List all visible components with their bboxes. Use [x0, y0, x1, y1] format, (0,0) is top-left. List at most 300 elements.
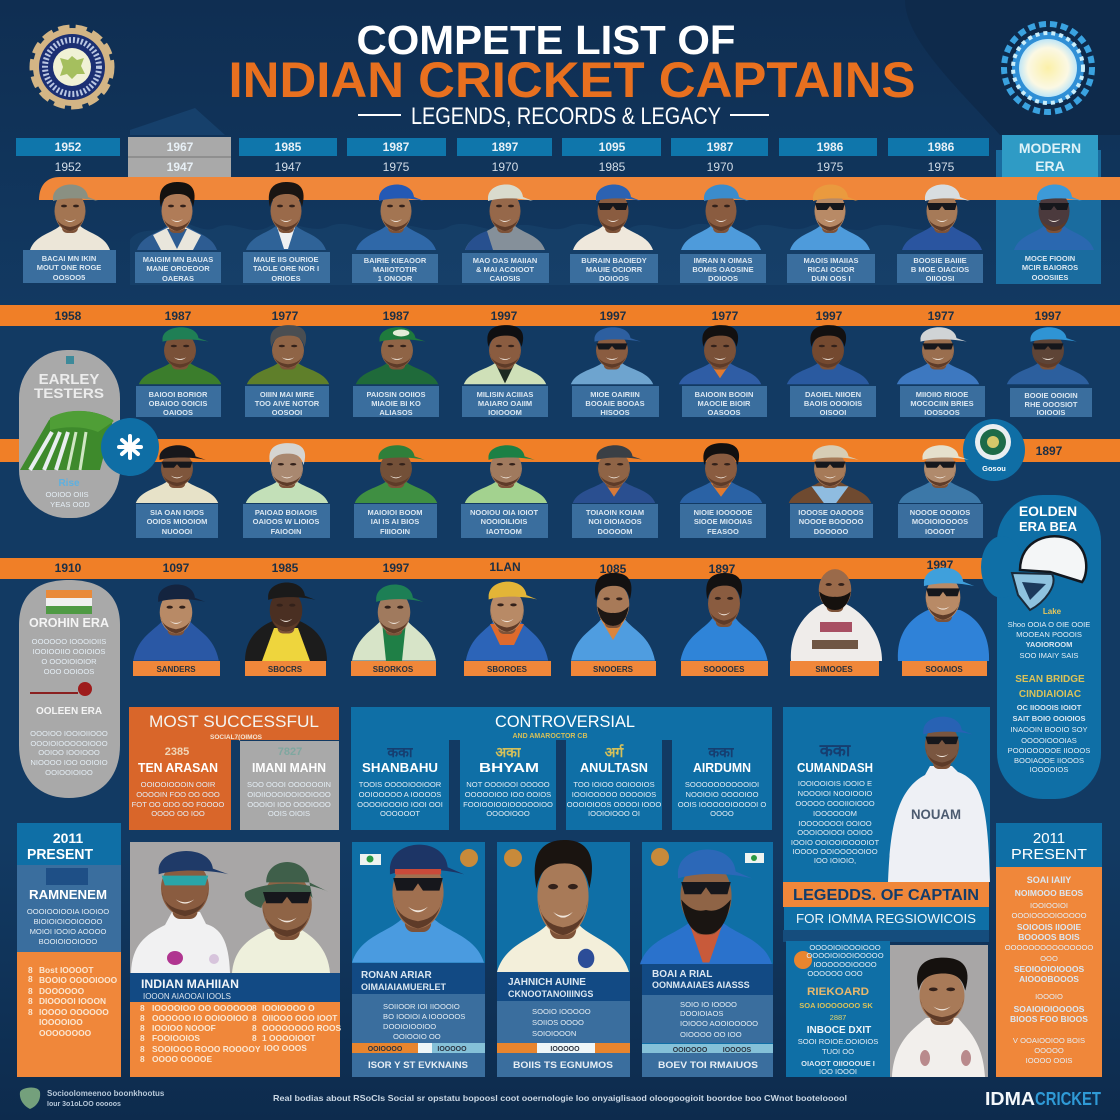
panel: origin era: OOIOO IOOIOOO	[38, 748, 100, 757]
portrait: captain 6	[573, 184, 653, 250]
row 3 portraits	[136, 443, 981, 503]
card: captain in cream kit: IOOOOO	[550, 1046, 580, 1053]
icon: flag	[745, 853, 764, 863]
panel: golden era: CINDIAIOIAC	[1019, 689, 1081, 700]
card: captain in cream kit: SOIIOS OOOO	[532, 1018, 584, 1027]
timeline band 3	[0, 439, 1120, 462]
panel: early teams: Rise	[58, 478, 80, 489]
panel: controversial	[351, 707, 772, 830]
panel: chandrash profile: NOUAM	[911, 806, 961, 822]
panel: two captains feature: FOOIOOIOS	[152, 1033, 200, 1043]
panel: record board: SOOI ROIOE.OOIOIOS	[798, 1037, 878, 1046]
card: captain in cream kit: SOOIO IOOOOO	[532, 1007, 591, 1016]
icon: orange medallion	[794, 951, 812, 969]
timeline header years: 1897	[492, 140, 519, 154]
icon: crest badge	[963, 419, 1025, 481]
card: anulasn: अर्ग	[605, 744, 624, 760]
portrait: black cap 1	[136, 445, 218, 503]
icon: bat and ball	[30, 682, 92, 696]
row 1 captions: ORIOES	[271, 274, 301, 283]
row 2 captions: IOIOOIS	[1037, 408, 1065, 417]
panel: two captains feature: 8	[252, 1013, 257, 1023]
panel: present left: 8	[28, 986, 33, 996]
portrait: green collar 2	[247, 325, 329, 384]
panel: two captains feature	[130, 842, 342, 1077]
card: anulasn: TOO IOIOO OOIOOIOS	[573, 780, 655, 789]
panel: present right: V OOAIOOIOO BOIS	[1013, 1036, 1085, 1045]
row 3 captions: NOOIOU OIA IOIOT	[470, 508, 538, 517]
card: captain with red shades: SOIIOOR IOI IIOOOIO	[383, 1002, 460, 1011]
panel: origin era: IOOIOOIIO OOIOIOS	[32, 647, 106, 656]
panel: record board	[786, 941, 988, 1077]
portrait: navy cap	[133, 585, 219, 661]
timeline header years: 1985	[275, 140, 302, 154]
card: captain with red shades: OOIOOIO OO	[393, 1032, 441, 1041]
panel: record board: RIEKOARD	[807, 986, 869, 998]
row 1 captions: BACAI MN IKIN	[42, 254, 96, 263]
card: mani main: SOO OOOI OOOOOOIN	[247, 780, 331, 789]
panel: present right: BOOOOS BOIS	[1018, 932, 1080, 942]
panel: two captains feature: OOOOOO IO OOIOOIOO	[152, 1013, 249, 1023]
row 2 captions: BOOIE OOIOIN	[1024, 391, 1078, 400]
icon: badge	[460, 849, 478, 867]
card: tem arasan: FOT OO ODO OO FOOOO	[132, 800, 224, 809]
row 3 captions: OOIOS MIOOIOM	[147, 517, 207, 526]
panel: golden era: OOOOIOOOIAS	[1021, 736, 1077, 745]
card: anulasn: ANULTASN	[580, 760, 648, 775]
panel: golden era: POOIOOOOOE IIOOOS	[1008, 746, 1090, 755]
panel: two captains feature: IOOIOO NOOOF	[152, 1023, 216, 1033]
portrait: light blue cap 9	[1007, 327, 1089, 384]
row 1 portraits	[30, 182, 1094, 250]
row 3 captions: FEASOO	[707, 527, 739, 536]
panel: modern era	[996, 135, 1101, 284]
panel: modern era: MODERN	[1019, 140, 1081, 156]
panel: record board: OOOOOO OOO	[807, 969, 863, 978]
card: mani main: IMANI MAHN	[252, 760, 326, 775]
card: mani main	[240, 741, 339, 830]
title	[228, 17, 916, 108]
row 1 captions: IMRAN N OIMAS	[694, 256, 752, 265]
row 1 captions: MANE OROEOOR	[146, 264, 210, 273]
card: shanbari	[351, 740, 449, 830]
panel: most successful: MOST SUCCESSFUL	[149, 712, 319, 731]
portrait: captain 3	[246, 182, 326, 250]
card: bhyam: अका	[495, 744, 522, 760]
panel: golden era: SAIT BOIO OOIOIOS	[1013, 714, 1085, 723]
icon: badge	[651, 848, 669, 866]
panel: record board: OIAOOT OIIOOOUE I	[801, 1059, 875, 1068]
panel: golden era	[981, 495, 1101, 799]
portrait: blue cap 5	[571, 327, 653, 384]
panel: origin era: OOO OOIOOS	[44, 667, 94, 676]
card: captain with red shades: ISOR Y ST EVKNAINS	[368, 1060, 468, 1070]
panel: present right: IOOOIO	[1035, 992, 1063, 1001]
row 4 captions: SBOCRS	[268, 665, 303, 674]
card: captain with red shades: RONAN ARIAR	[361, 970, 433, 981]
row 2 captions	[136, 386, 1092, 417]
timeline header years	[16, 137, 989, 177]
panel: origin era	[19, 580, 120, 798]
panel: two captains feature: OOOOOOOO ROOS	[262, 1023, 342, 1033]
row 4 captions	[133, 661, 987, 676]
panel: present left: 8	[28, 1007, 33, 1017]
panel: origin era: OROHIN ERA	[29, 615, 110, 630]
card: shanbari: SHANBAHU	[362, 760, 438, 775]
panel: present left: 2011	[53, 830, 83, 846]
timeline header years: 1987	[707, 140, 734, 154]
row 4 captions: SANDERS	[156, 665, 196, 674]
timeline header years: 1975	[928, 160, 955, 174]
card: tem arasan	[129, 740, 231, 830]
card: bearded captain in blue cap: IOIOOO AOOIOOOOO	[680, 1019, 758, 1028]
card: captain in cream kit: CKNOOTANOIIINGS	[508, 989, 593, 999]
icon: flag	[360, 854, 381, 865]
timeline band 2: 1977	[928, 309, 955, 323]
panel: record board: IOOOOOOIOOOO	[813, 960, 877, 969]
card: bearded captain in blue cap	[640, 842, 773, 1077]
row 2 captions: OISOOI	[820, 408, 846, 417]
row 1 captions	[23, 250, 1078, 283]
panel: present right: SEOIOOIOIOOOS	[1014, 964, 1085, 974]
panel: present right: SOAI IAIIY	[1027, 875, 1071, 885]
card: bearded captain in blue cap: OIOOOO OO IOO	[680, 1030, 742, 1039]
panel: modern era: ERA	[1035, 158, 1065, 174]
panel: present right: BIOOS FOO BIOOS	[1010, 1014, 1088, 1024]
panel: early teams	[19, 350, 120, 518]
panel: chandrash profile: IOOOOOOM	[813, 809, 857, 818]
row 2 captions: OASOOS	[708, 408, 740, 417]
row 1 captions: OIIOOSI	[926, 274, 954, 283]
timeline header years: 1970	[492, 160, 519, 174]
row 1 captions: & MAI ACOIOOT	[476, 265, 534, 274]
card: captain with red shades: DOOIOIOOIOO	[383, 1022, 436, 1031]
timeline band 4: 1LAN	[489, 560, 521, 574]
row 3 captions: TOIAOIN KOIAM	[586, 508, 644, 517]
panel: record board: 2887	[830, 1013, 846, 1022]
card: aironn: NOOIOIO OOOOIOO	[686, 790, 759, 799]
panel: golden era: IOOOOIOS	[1030, 765, 1068, 774]
row 2 captions: IOOSOOS	[924, 408, 960, 417]
timeline header years: 1975	[817, 160, 844, 174]
row 4 captions: SBOROES	[487, 665, 528, 674]
timeline header years: 1947	[275, 160, 302, 174]
portrait: yellow kit	[245, 583, 327, 661]
panel: golden era: BOOIAOOE IIOOOS	[1014, 756, 1084, 765]
panel: origin era: OOOIOIOOOOOIOOO	[30, 739, 108, 748]
row 1 captions: MCIR BAIOROS	[1022, 263, 1078, 272]
panel: controversial: CONTROVERSIAL	[495, 712, 635, 731]
row 1 captions: MAO OAS MAIIAN	[473, 256, 537, 265]
row 3 captions: IOOOSE OAOOOS	[798, 508, 864, 517]
portrait: bearded, blue kit	[571, 573, 655, 661]
footer: disclaimer: Real bodias about RSoCIs Social sr opstatu bopoosl coot ooernologie loo onyaiglisaod oloogoogioit boordoe boo CWnot bootelooool	[273, 1093, 847, 1103]
timeline band 4: 1910	[55, 561, 82, 575]
panel: origin era: NIOOOO IOO OOIOIO	[30, 758, 108, 767]
panel: present left: IOOOO OOOOOO	[39, 1007, 109, 1017]
panel: origin era: OOOIOO IOOIOIIOOO	[30, 729, 108, 738]
row 1 captions: B MOE OIACIOS	[911, 265, 969, 274]
row 2 captions: MAIARO OAIIM	[478, 399, 532, 408]
card: bhyam: OOOOOIOO IOO OOIOS	[465, 790, 551, 799]
card: captain in cream kit	[497, 840, 630, 1077]
panel: present left: BOOIOIOOIOOO	[39, 937, 97, 946]
panel: golden era: MOOEAN POOOIS	[1016, 630, 1082, 639]
portrait: captain 5	[465, 184, 545, 250]
logo: left crest	[33, 28, 111, 106]
row 4 portraits	[133, 568, 989, 661]
row 3 captions: IAOTOOM	[486, 527, 522, 536]
card: aironn: OOOO	[710, 809, 734, 818]
portrait: navy cap with shades	[131, 851, 230, 973]
card: shanbari: कका	[386, 744, 414, 760]
card: bearded captain in blue cap: OONMAAIAES AIASSS	[652, 980, 750, 990]
row 3 captions: DOOOOM	[598, 527, 632, 536]
portrait: captain 7	[681, 184, 761, 250]
timeline band 1	[39, 177, 1120, 200]
portrait: captain 9	[902, 184, 982, 250]
portrait: dark kit 6	[679, 325, 761, 384]
portrait: grey cap 5	[573, 445, 655, 503]
logo: right crest	[1004, 24, 1092, 112]
subtitle: LEGENDS, RECORDS & LEGACY	[411, 103, 721, 130]
timeline header years: 1986	[817, 140, 844, 154]
panel: present left: DOOOOOO	[39, 986, 85, 996]
card: captain in cream kit: BOIIS TS EGNUMOS	[513, 1060, 613, 1070]
panel: present left: 8	[28, 965, 33, 975]
row 1 captions: RICAI OCIOR	[807, 265, 855, 274]
portrait: cream kit	[497, 840, 629, 972]
panel: two captains feature: SOOIOOO ROOO ROOOOY	[152, 1044, 261, 1054]
card: aironn	[672, 740, 772, 830]
row 3 captions: NOI OIOIAOOS	[588, 517, 642, 526]
portrait: green and white kit 4	[464, 325, 546, 384]
row 1 captions: MOUT ONE ROGE	[37, 263, 101, 272]
panel: origin era: OOLEEN ERA	[36, 706, 102, 717]
row 4 captions: SBORKOS	[373, 665, 414, 674]
card: mani main: OOOIOI IOO OOOIOOO	[247, 800, 331, 809]
row 3 captions: NOOOE BOOOOO	[799, 517, 863, 526]
portrait: green cap 1	[139, 327, 221, 384]
panel: record board: OOOOIOIOOIOOOOO	[806, 951, 884, 960]
timeline header years: 1986	[928, 140, 955, 154]
card: aironn: OOIS IOOOOOIOOOOI O	[678, 800, 766, 809]
timeline header years: 1985	[599, 160, 626, 174]
row 1 captions: MAIIOTOTIR	[373, 265, 418, 274]
row 3 captions: MAIOIOI BOOM	[368, 508, 422, 517]
footer: source text: Iour 3o1oLOO ooooos	[47, 1101, 121, 1108]
panel: golden era: ERA BEA	[1019, 519, 1078, 534]
row 2 captions: BAIOOIN BOOIN	[695, 390, 753, 399]
panel: present left: BOOIO OOOOIOOO	[39, 975, 118, 985]
panel: most successful: SOCIAL7(OIMOS	[210, 734, 263, 741]
portrait: sun hat 8	[899, 445, 981, 503]
panel: two captains feature: IOOOOIOO OO OOOOOO	[152, 1003, 253, 1013]
timeline band 2: 1977	[272, 309, 299, 323]
panel: chandrash profile: IOOOOOOOI OOIOO	[798, 819, 872, 828]
panel: chandrash profile: IOO IOIOIO,	[814, 856, 856, 865]
panel: golden era: YAOIOROOM	[1026, 640, 1072, 649]
row 1 captions: MAIGIM MN BAUAS	[143, 255, 213, 264]
panel: golden era: OC IIOOOIS IOIOT	[1017, 703, 1082, 712]
panel: chandrash profile: IOOIO OOIOOIOOOOIOT	[791, 838, 879, 847]
row 2 captions: BOOAIE BOOAS	[585, 399, 645, 408]
panel: present right: IOOOO OOIS	[1026, 1056, 1072, 1065]
row 1 captions: DOIOOS	[708, 274, 738, 283]
row 4 captions: SNOOERS	[593, 665, 634, 674]
panel: present left: IOOOOIOO	[39, 1017, 83, 1027]
panel: present right: NOIMOOO BEOS	[1015, 888, 1084, 898]
footer: shield icon	[20, 1087, 40, 1109]
row 1 captions: DUN OOS I	[811, 274, 851, 283]
panel: chandrash profile: IOOIOOIOIS IOOIO E	[798, 779, 872, 788]
row 3 captions	[136, 504, 983, 538]
timeline header years: 1952	[55, 160, 82, 174]
timeline header years: 1975	[383, 160, 410, 174]
card: bearded captain in blue cap: DOOIOIAOS	[680, 1009, 723, 1018]
card: captain with red shades: BO IOOIOI A IOOOOOS	[383, 1012, 465, 1021]
portrait: navy cap, blue kit	[352, 845, 484, 963]
row 3 captions: NUOOOI	[162, 527, 192, 536]
panel: chandrash profile: IOOOO OOIOOOOOIOO	[792, 847, 878, 856]
row 2 captions: OIIIN MAI MIRE	[260, 390, 314, 399]
panel: golden era: Lake	[1043, 607, 1062, 616]
row 3 captions: SIA OAN IOIOS	[150, 508, 204, 517]
portrait: green hat	[232, 862, 330, 973]
card: bhyam: FOOIOOIOOIOOOOOIOO	[463, 800, 553, 809]
card: bhyam: NOT OOOIOOI OOOOO	[466, 780, 550, 789]
row 4 captions: SOOOOES	[704, 665, 745, 674]
panel: two captains feature: 8	[140, 1033, 145, 1043]
panel: two captains feature: 8	[252, 1003, 257, 1013]
card: aironn: कका	[707, 744, 735, 760]
row 2 captions: MOCOCIIN BRIES	[910, 399, 974, 408]
panel: present right: OOOOOOOOOOOOOOO	[1005, 943, 1093, 952]
panel: origin era: OOOOOO IOOOIOIIS	[32, 637, 106, 646]
card: shanbari: TOOIS OOOOIOOIOOR	[359, 780, 442, 789]
card: captain in cream kit: SOIOIOOON	[532, 1029, 576, 1038]
footer: logo: CRICKET	[1035, 1089, 1101, 1109]
panel: present right	[996, 823, 1102, 1077]
panel: two captains feature: IOOIOOOO O	[262, 1003, 315, 1013]
row 2 captions: ALIASOS	[379, 408, 413, 417]
panel: two captains feature: OIIOOO OOO IOOT	[262, 1013, 338, 1023]
row 3 captions: MOOIOIOOOOS	[912, 517, 968, 526]
row 2 captions: IOIOOOM	[488, 408, 522, 417]
portrait: light blue cap	[898, 568, 989, 661]
icon: snowflake badge	[101, 418, 159, 476]
card: mani main: OIOIIOOOIOOIOOIOOO	[247, 790, 331, 799]
timeline band 2: 1997	[491, 309, 518, 323]
panel: golden era: SEAN BRIDGE	[1015, 674, 1085, 685]
panel: two captains feature: 8	[140, 1013, 145, 1023]
card: tem arasan: OOOOIN FOO OO OOO	[136, 790, 220, 799]
panel: two captains feature: 8	[140, 1054, 145, 1064]
panel: two captains feature: 8	[252, 1023, 257, 1033]
timeline band 4	[0, 558, 985, 579]
row 2 captions: OBAIOO OOICIS	[149, 399, 207, 408]
legends banner: LEGEDDS. OF CAPTAIN	[793, 887, 979, 904]
row 1 captions: OOOSIIES	[1032, 273, 1068, 282]
row 1 captions: BOMIS OAOSINE	[692, 265, 754, 274]
row 2 captions: OAIOOS	[163, 408, 193, 417]
panel: record board: OOOOIOIOOOIOOO	[809, 943, 881, 952]
panel: origin era: OOIOOIOIOO	[45, 768, 93, 777]
footer: logo: IDMA	[985, 1089, 1035, 1109]
row 1 captions: MAOIS IMAIIAS	[803, 256, 859, 265]
portrait: captain 1	[30, 184, 110, 250]
row 4 captions: SIMOOES	[815, 665, 853, 674]
timeline band 2: 1997	[1035, 309, 1062, 323]
timeline band 2: 1987	[165, 309, 192, 323]
row 1 captions: OAERAS	[162, 274, 194, 283]
card: tem arasan: TEN ARASAN	[138, 760, 218, 775]
portrait: player in white	[888, 717, 990, 882]
panel: early teams: TESTERS	[34, 385, 104, 401]
panel: early teams: EARLEY	[39, 371, 99, 388]
portrait: white cap 8	[897, 327, 979, 384]
card: mani main: 7827	[278, 746, 302, 758]
row 3 captions: NOOIOILIOIS	[481, 517, 527, 526]
card: shanbari: OOOOIOOOIO IOOI OOI	[357, 800, 443, 809]
portrait: yellow cap	[466, 582, 548, 661]
row 2 captions: BAIOOI BORIOR	[149, 390, 208, 399]
row 1 captions: BAIRIE KIEAOOR	[364, 256, 427, 265]
card: captain with red shades: IOOOOO	[437, 1046, 467, 1053]
portrait: captain 4	[356, 184, 436, 250]
card: anulasn: IOOIOIOOO OI	[588, 809, 640, 818]
panel: present right: SOIOOIS IIOOIE	[1017, 922, 1081, 932]
panel: present left: PRESENT	[27, 846, 93, 863]
panel: record board: INBOCE DXIT	[807, 1025, 871, 1036]
panel: present left: BIOIOIOIOOIOOOO	[34, 917, 102, 926]
timeline band 4: 1897	[709, 562, 736, 576]
row 1 captions: CAIOSIS	[490, 274, 520, 283]
card: captain with red shades: OOIOOOO	[368, 1046, 403, 1053]
row 3 captions: DOOOOO	[814, 527, 848, 536]
portrait: white test kit	[791, 569, 882, 661]
panel: origin era: O OOOIOIOIOR	[41, 657, 97, 666]
portrait: captain 2	[137, 182, 217, 250]
card: tem arasan: OOOO OO IOO	[151, 809, 205, 818]
card: bhyam: BHYAM	[479, 760, 539, 775]
portrait: green kit 3	[355, 445, 437, 503]
row 1 captions: MAUE IIS OURIOE	[253, 255, 319, 264]
portrait: green cap 4	[465, 445, 547, 503]
card: bearded captain in blue cap: OOIOOOO	[673, 1047, 708, 1054]
footer: source text: Socioolomeenoo boonkhootus	[47, 1089, 165, 1098]
panel: present left: MOIOI IOOIO AOOOO	[30, 927, 106, 936]
row 2 captions: MAOCIE BIOIR	[698, 399, 751, 408]
card: tem arasan: OOIOOIOOOIN OOIR	[141, 780, 216, 789]
card: tem arasan: 2385	[165, 746, 189, 758]
panel: present left: 8	[28, 996, 33, 1006]
panel: golden era: SOO IMAIY SAIS	[1020, 651, 1078, 660]
timeline header years: 1947	[167, 160, 194, 174]
row 2 captions: RHE OOOSIOT	[1025, 400, 1078, 409]
panel: present right: OOOIOOOOIOOOOO	[1011, 911, 1087, 920]
card: anulasn: OOOIOIOOS OOOOI IOOO	[567, 800, 661, 809]
row 1 captions: MOCE FIOOIN	[1025, 254, 1075, 263]
panel: present right: AIOOOBOOOS	[1019, 974, 1079, 984]
panel: controversial: AND AMAROCTOR CB	[512, 733, 588, 740]
card: bearded captain in blue cap: IOOOOS	[723, 1047, 752, 1054]
timeline band 4: 1097	[163, 561, 190, 575]
card: shanbari: OOOOOOT	[380, 809, 420, 818]
panel: two captains feature: OOOO OOOOE	[152, 1054, 212, 1064]
portrait: grey hair 2	[246, 443, 328, 503]
panel: record board: SOA IOOOOOOO SK	[799, 1001, 873, 1010]
